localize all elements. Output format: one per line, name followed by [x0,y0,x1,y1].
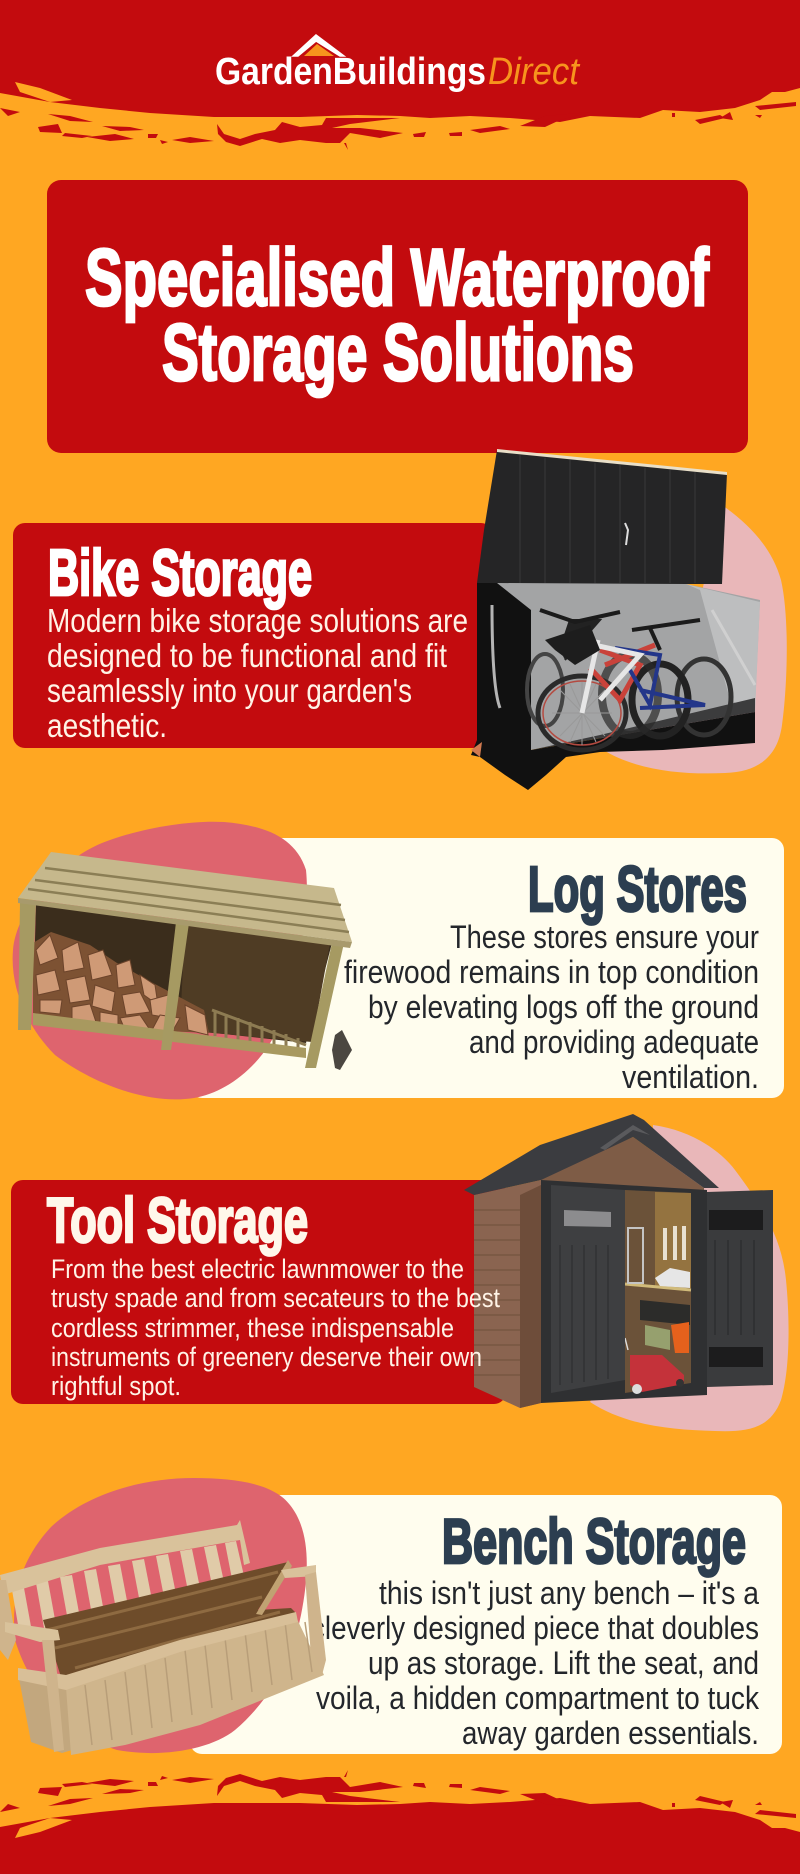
text: log stores description [344,919,759,1095]
text: tool storage description: instruments of greenery deserve their own [51,1342,482,1372]
image: garden tool shed [464,1114,773,1408]
logo wordmark: Direct [488,51,580,93]
text: bike storage description: seamlessly into your garden's [47,672,412,709]
text: log stores description: ventilation. [622,1059,759,1095]
heading: tool storage: Tool Storage [47,1186,308,1256]
text: bike storage description: designed to be functional and fit [47,637,447,674]
text: log stores description: by elevating logs off the ground [368,989,759,1025]
top brush header [0,0,800,150]
panel: bench storage [14,1478,782,1754]
heading: bike storage: Bike Storage [48,536,312,609]
text: bike storage description: Modern bike storage solutions are [47,602,468,639]
text: tool storage description: cordless strimmer, these indispensable [51,1313,454,1343]
logo wordmark: GardenBuildings [215,51,486,93]
blob: bike storage backdrop [596,505,787,773]
panel: tool storage [11,1180,506,1404]
blob: bench storage backdrop [14,1478,307,1753]
bottom brush footer [0,1770,800,1874]
blob: tool storage backdrop [590,1125,789,1431]
text: bench storage description: this isn't just any bench – it's a [379,1575,759,1611]
text: bike storage description [47,602,468,744]
text: log stores description: and providing adequate [469,1024,759,1060]
text: log stores description: firewood remains in top condition [344,954,759,990]
image: log store [18,852,352,1070]
panel: bike storage [13,523,493,748]
text: tool storage description: trusty spade and from secateurs to the best [51,1283,500,1313]
text: tool storage description: From the best electric lawnmower to the [51,1254,464,1284]
blob: log stores backdrop [13,822,307,1099]
text: tool storage description [51,1254,500,1401]
logo roof icon [293,35,344,56]
title panel [47,180,748,453]
text: bike storage description: aesthetic. [47,707,167,744]
text: bench storage description: away garden essentials. [462,1715,759,1751]
text: bench storage description [311,1575,760,1751]
logo: Garden Buildings Direct [215,35,580,93]
image: storage bench [0,1520,326,1755]
text: tool storage description: rightful spot. [51,1371,181,1401]
panel: log stores [13,822,784,1099]
panel: tool storage text [47,1186,500,1401]
image: bike storage unit [471,449,760,790]
